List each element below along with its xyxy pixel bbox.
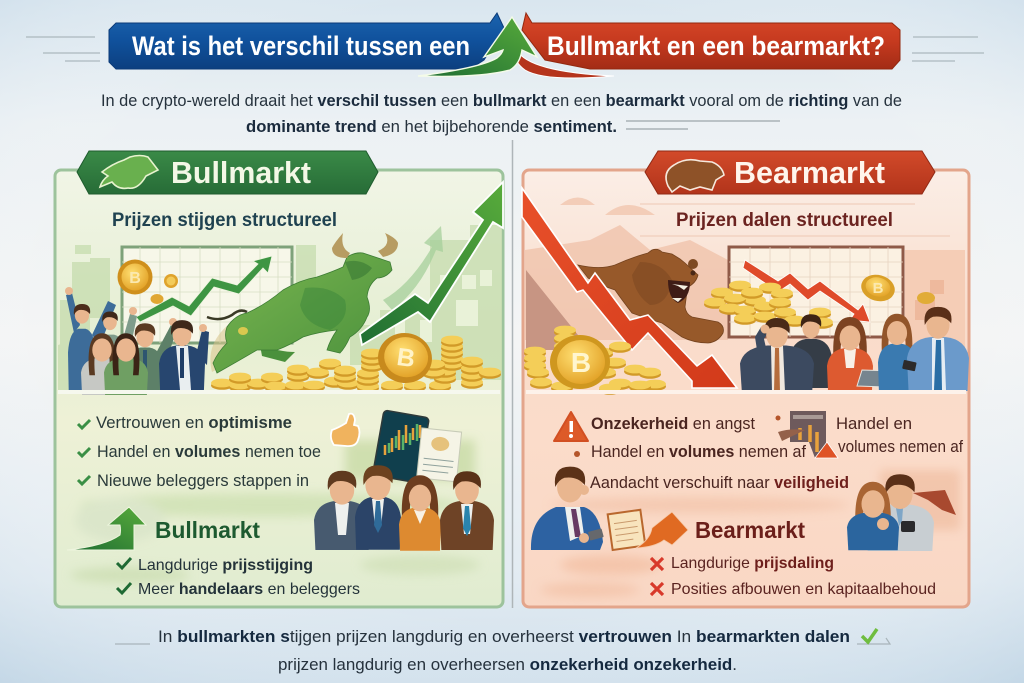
person: [847, 482, 899, 550]
coins: bear middle pile: [704, 281, 833, 329]
icon: tablet: [857, 370, 893, 387]
person: couple: [847, 474, 934, 551]
icon: red swoosh: [513, 50, 614, 78]
list: bullmarkt kenmerken: [117, 557, 360, 598]
title right: Bullmarkt en een bearmarkt?: [547, 31, 885, 61]
icon: bear badge: [666, 160, 724, 192]
title left: Wat is het verschil tussen een: [132, 31, 470, 61]
list: bearmarkt kenmerken: [651, 555, 936, 598]
lower bear background: [540, 470, 960, 597]
panel frame bull: [55, 170, 503, 607]
people: cheering group: [65, 287, 209, 395]
panel: bearmarkt: [522, 151, 969, 607]
icon: bull badge: [100, 156, 158, 188]
chart board: [729, 247, 903, 337]
panel frame bear: [523, 170, 969, 607]
text: bullmarkt: Bullmarkt: [171, 155, 311, 190]
people: worried group: [740, 307, 969, 394]
footer text: In bullmarkten stijgen prijzen langdurig en overheerst vertrouwen In bearmarkten dalen: [158, 627, 850, 646]
person: [355, 465, 401, 550]
item: nieuwe: Nieuwe beleggers stappen in: [97, 472, 309, 490]
person: [104, 333, 148, 395]
icon: bitcoin coin left: B: [129, 270, 141, 287]
subheading: bullmarkt: Bullmarkt: [155, 517, 260, 543]
item: prijsstijging: Langdurige prijsstijging: [138, 557, 313, 574]
person: [866, 474, 934, 551]
icon: green arrow small: [67, 507, 146, 550]
icon: big bitcoin: B: [395, 343, 417, 373]
person: [81, 333, 123, 395]
icon: phone: [901, 521, 915, 532]
person: [790, 314, 832, 388]
icon: bull: [207, 233, 398, 373]
icon: warning triangle: [554, 412, 588, 441]
person: [314, 471, 370, 550]
icon: check: [862, 629, 877, 642]
person: [127, 318, 177, 394]
item: onzekerheid: Onzekerheid en angst: [591, 415, 755, 433]
icon: document: [608, 510, 645, 550]
icon: large green arrow: [360, 182, 503, 345]
icon: phone with candles: [373, 410, 429, 483]
person: [907, 307, 969, 391]
icon: bitcoin coin left: [118, 260, 178, 304]
banner: right red: [522, 13, 900, 69]
item: handel rechts: Handel en: [836, 415, 912, 433]
item: vertrouwen: Vertrouwen en optimisme: [96, 414, 292, 432]
person: [740, 318, 814, 392]
person: [399, 475, 441, 551]
panel: bullmarkt: [55, 151, 503, 607]
item: handelaars: Meer handelaars en beleggers: [138, 581, 360, 598]
heading: prijzen stijgen: Prijzen stijgen structureel: [112, 210, 337, 231]
intro text: In de crypto-wereld draait het verschil tussen een bullmarkt en een bearmarkt vooral om de richting van de: [101, 91, 902, 110]
icon: big bitcoin: [375, 329, 435, 387]
icon: bear: [578, 249, 723, 343]
intro text: [101, 91, 902, 136]
icon: thumbs up: [331, 414, 360, 446]
item: aandacht: Aandacht verschuift naar veiligheid: [590, 474, 849, 492]
icon: chart arrow: [136, 256, 272, 322]
icon: small coins: B: [873, 280, 884, 297]
person: man with phone: [531, 467, 604, 550]
icon: orange arrow: [636, 512, 688, 548]
people: team bull: [314, 465, 494, 551]
item: handel: Handel en volumes nemen toe: [97, 443, 321, 461]
faded arrow: [383, 226, 443, 310]
text: bearmarkt: Bearmarkt: [734, 155, 885, 190]
item: handel rechts: volumes nemen af: [838, 438, 963, 456]
horns: [332, 233, 398, 258]
coins: bull pile: [211, 336, 501, 393]
heading: prijzen dalen: Prijzen dalen structureel: [676, 210, 893, 231]
person: [827, 317, 873, 394]
person: [65, 287, 116, 390]
icon: big bitcoin: B: [571, 347, 591, 378]
banner: left blue: [109, 13, 504, 69]
item: handel rechts: [836, 415, 963, 456]
icon: small coins: [858, 271, 935, 305]
icon: phone: [902, 360, 917, 371]
header: bullmarkt: [77, 151, 378, 194]
icon: big bitcoin: [550, 335, 610, 389]
footer text: prijzen langdurig en overheersen onzekerheid onzekerheid.: [278, 655, 737, 674]
icon: paper: [417, 428, 462, 482]
icon: green up arrow: [418, 17, 537, 76]
lower bull background: [70, 440, 480, 583]
pale mountain and city background: [525, 198, 965, 360]
coins: bear pile: [524, 326, 666, 395]
person: [159, 320, 209, 392]
icon: falling candles tablet: [776, 411, 838, 458]
icon: chart arrow down: [743, 260, 870, 322]
item: prijsdaling: Langdurige prijsdaling: [671, 555, 834, 572]
icon: broken rust arrow: [913, 490, 956, 515]
pale city background: [58, 225, 502, 390]
intro text: dominante trend en het bijbehorende sentiment.: [246, 117, 617, 136]
item: posities: Posities afbouwen en kapitaalbehoud: [671, 581, 936, 598]
footer text: [115, 627, 890, 674]
chart board: [122, 247, 292, 343]
person: [440, 471, 494, 550]
list: bull benefits: [78, 414, 321, 490]
person: [94, 307, 137, 391]
item: handel: Handel en volumes nemen af: [591, 443, 806, 461]
header: bearmarkt: [645, 151, 935, 194]
list: bear top: [554, 412, 963, 492]
title banner: [26, 13, 984, 78]
subheading: bearmarkt: Bearmarkt: [695, 517, 805, 543]
icon: large red arrow: [522, 188, 737, 388]
person: [878, 314, 916, 392]
